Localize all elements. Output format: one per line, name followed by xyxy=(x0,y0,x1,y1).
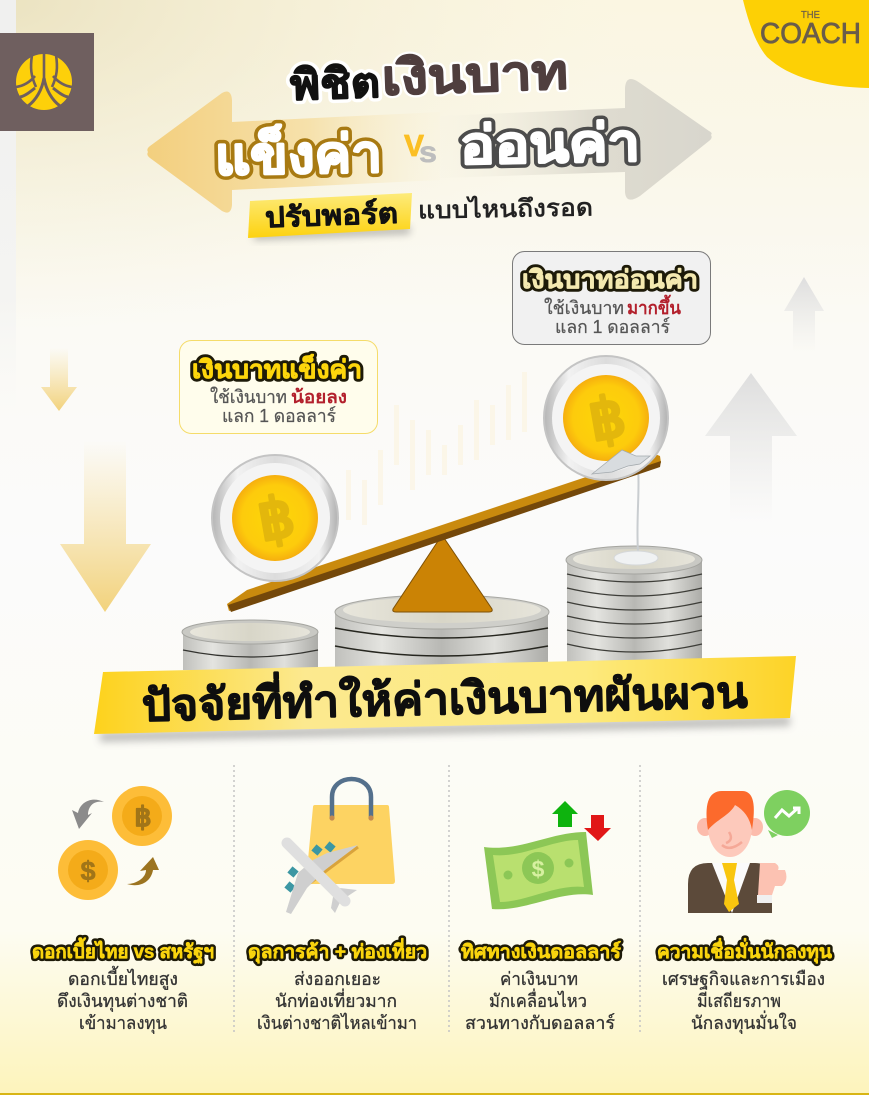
title: พิชิต xyxy=(289,59,381,109)
icon: confident investor xyxy=(688,790,810,913)
arrow: right grey weakening xyxy=(440,79,712,200)
column 1: interest rate: ดึงเงินทุนต่างชาติ xyxy=(57,991,188,1012)
column 3: dollar direction: สวนทางกับดอลลาร์ xyxy=(465,1013,615,1033)
arrow: large grey up xyxy=(705,373,797,522)
callout: weak baht: มากขึ้น xyxy=(627,294,682,318)
coin stack: middle xyxy=(335,595,549,670)
coin: right baht xyxy=(544,356,668,480)
candlestick chart backdrop xyxy=(346,372,527,525)
heading: vs: s xyxy=(419,136,437,169)
callout: strong baht: น้อยลง xyxy=(291,387,347,407)
heading: vs: V xyxy=(404,128,424,163)
column 4: investor confidence: นักลงทุนมั่นใจ xyxy=(691,1010,797,1034)
seesaw triangle xyxy=(393,535,492,612)
callout: weak baht: เงินบาทอ่อนค่า xyxy=(522,266,698,294)
subtitle: ปรับพอร์ต xyxy=(265,198,399,233)
title: เงินบาท xyxy=(381,46,569,106)
arrow: small grey up xyxy=(784,277,824,352)
coin: right baht: ฿ xyxy=(584,384,630,453)
title xyxy=(289,46,569,109)
subtitle: แบบไหนถึงรอด xyxy=(418,193,593,225)
heading: strong baht: แข็งค่า xyxy=(214,123,382,186)
icon: currency exchange: $ xyxy=(80,856,96,886)
arrow: left gold strengthening xyxy=(147,92,440,213)
callout: weak baht: เงินบาทอ่อนค่า xyxy=(522,266,698,294)
callout: strong baht xyxy=(180,340,378,434)
column 2: trade and tourism: ดุลการค้า + ท่องเที่ยว xyxy=(248,938,427,964)
column 4: investor confidence xyxy=(657,938,832,1034)
column 2: trade and tourism: นักท่องเที่ยวมาก xyxy=(275,988,397,1011)
icon: shopping bag and plane xyxy=(284,779,395,914)
column 4: investor confidence: ความเชื่อมั่นนักลงทุน xyxy=(657,938,832,964)
column dividers xyxy=(234,765,640,1035)
column 4: investor confidence: เศรษฐกิจและการเมือง xyxy=(662,969,825,990)
column 3: dollar direction: ทิศทางเงินดอลลาร์ xyxy=(461,941,622,963)
column 1: interest rate: ดอกเบี้ยไทย vs สหรัฐฯ xyxy=(32,937,214,965)
coin: left baht: ฿ xyxy=(253,484,299,553)
column 1: interest rate: ดอกเบี้ยไทยสูง xyxy=(68,966,178,990)
heading: strong baht: แข็งค่า xyxy=(214,123,382,186)
column 3: dollar direction: มักเคลื่อนไหว xyxy=(489,988,587,1011)
heading: vs xyxy=(404,128,437,169)
arrow: small gold down xyxy=(41,348,77,411)
bottom yellow line xyxy=(0,1093,869,1095)
column 4: investor confidence: ความเชื่อมั่นนักลงทุน xyxy=(657,938,832,964)
column 2: trade and tourism: เงินต่างชาติไหลเข้ามา xyxy=(257,1012,417,1033)
water drip xyxy=(614,468,658,565)
banner: factors xyxy=(94,656,796,742)
title: เงินบาท xyxy=(381,46,569,106)
column 2: trade and tourism xyxy=(248,938,427,1033)
icon: dollar bill with arrows xyxy=(484,801,611,909)
logo: bank emblem xyxy=(0,33,94,131)
callout: strong baht: แลก 1 ดอลลาร์ xyxy=(222,406,336,426)
icon: dollar bill with arrows: $ xyxy=(532,856,545,882)
callout: weak baht xyxy=(512,252,710,344)
column 1: interest rate: เข้ามาลงทุน xyxy=(79,1013,167,1034)
subtitle xyxy=(248,193,593,240)
column 2: trade and tourism: ดุลการค้า + ท่องเที่ยว xyxy=(248,938,427,964)
icon: currency exchange xyxy=(58,786,172,900)
callout: weak baht: ใช้เงินบาท xyxy=(544,297,624,318)
logo: The Coach corner: COACH xyxy=(760,18,861,50)
seesaw plank xyxy=(227,454,661,612)
column 1: interest rate xyxy=(32,937,214,1034)
column 1: interest rate: ดอกเบี้ยไทย vs สหรัฐฯ xyxy=(32,937,214,965)
icon: currency exchange: ฿ xyxy=(134,802,152,832)
callout: strong baht: เงินบาทแข็งค่า xyxy=(192,354,362,384)
coin stack: left xyxy=(182,620,318,670)
heading: weak baht: อ่อนค่า xyxy=(459,114,640,176)
callout: strong baht: ใช้เงินบาท xyxy=(210,386,287,407)
callout: strong baht: เงินบาทแข็งค่า xyxy=(192,354,362,384)
column 3: dollar direction: ทิศทางเงินดอลลาร์ xyxy=(461,941,622,963)
coin stack: right xyxy=(566,546,702,668)
column 3: dollar direction: ค่าเงินบาท xyxy=(500,969,578,989)
title: พิชิต xyxy=(289,59,381,109)
arrow: large gold down xyxy=(60,440,151,612)
heading: weak baht: อ่อนค่า xyxy=(459,114,640,176)
column 2: trade and tourism: ส่งออกเยอะ xyxy=(294,969,381,989)
banner: factors: ปัจจัยที่ทำให้ค่าเงินบาทผันผวน xyxy=(141,661,748,731)
column 3: dollar direction xyxy=(461,941,622,1033)
callout: weak baht: แลก 1 ดอลลาร์ xyxy=(555,317,670,337)
column 4: investor confidence: มีเสถียรภาพ xyxy=(697,991,781,1011)
logo: The Coach corner xyxy=(743,0,869,88)
logo: The Coach corner: THE xyxy=(801,10,820,21)
coin: left baht xyxy=(212,455,338,581)
